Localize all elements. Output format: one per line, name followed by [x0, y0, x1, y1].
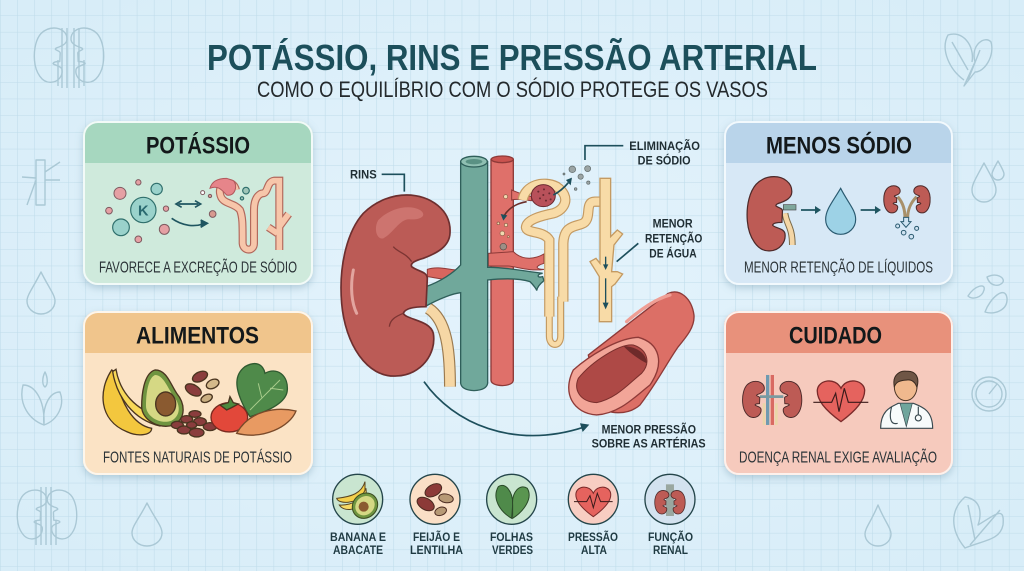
- icon: glomerulus: [531, 185, 555, 207]
- panel: cuidado: [724, 311, 953, 475]
- panel: alimentos: [83, 311, 313, 475]
- label: pressão alta: PRESSÃO: [568, 529, 618, 544]
- label: menor retenção de água: DE ÁGUA: [649, 246, 697, 261]
- label: função renal: [648, 529, 693, 557]
- icon: aorta: [488, 156, 544, 386]
- label: menor pressão sobre as artérias: SOBRE AS ARTÉRIAS: [592, 436, 706, 451]
- label: feijão e lentilha: FEIJÃO E: [413, 529, 460, 544]
- icon: vena cava: [426, 156, 544, 391]
- label: eliminação de sódio: [585, 138, 700, 167]
- caption: potássio: FAVORECE A EXCREÇÃO DE SÓDIO: [99, 260, 297, 276]
- icon: nephron tubule: [523, 184, 605, 344]
- label: função renal: RENAL: [653, 543, 688, 557]
- label: menor retenção de água: MENOR: [653, 217, 693, 231]
- caption: menos sódio: MENOR RETENÇÃO DE LÍQUIDOS: [744, 260, 933, 276]
- icon: leafy greens: [487, 474, 537, 524]
- panel: menos sódio: [724, 121, 953, 285]
- label: feijão e lentilha: LENTILHA: [410, 543, 463, 557]
- label: função renal: FUNÇÃO: [648, 529, 693, 544]
- title: POTÁSSIO, RINS E PRESSÃO ARTERIAL: [207, 36, 817, 78]
- label: banana e abacate: BANANA E: [330, 530, 386, 544]
- subtitle: COMO O EQUILÍBRIO COM O SÓDIO PROTEGE OS VASOS: [257, 77, 768, 102]
- label: folhas verdes: FOLHAS: [490, 530, 533, 544]
- label: rins: RINS: [350, 168, 377, 182]
- label: pressão alta: [568, 529, 618, 557]
- label: pressão alta: ALTA: [581, 543, 607, 557]
- icon: artery cross-section: [569, 292, 694, 415]
- arrows: water down duct: [603, 257, 609, 309]
- arrow: into aorta: [501, 202, 527, 221]
- central diagram: kidney, vessels, nephron and artery: [341, 138, 706, 451]
- icon: sodium particles: [563, 166, 591, 190]
- label: rins: [350, 168, 404, 192]
- icon: potassium ions and nephron: [106, 178, 289, 250]
- caption: cuidado: DOENÇA RENAL EXIGE AVALIAÇÃO: [739, 450, 937, 466]
- icon: banana and avocado: [333, 474, 383, 524]
- label: menor pressão sobre as artérias: [592, 421, 706, 451]
- label: folhas verdes: VERDES: [492, 543, 533, 557]
- label: folhas verdes: [490, 530, 533, 557]
- icon: ureter: [428, 308, 450, 387]
- label: banana e abacate: ABACATE: [333, 543, 383, 557]
- label: eliminação de sódio: DE SÓDIO: [638, 152, 691, 167]
- label: eliminação de sódio: ELIMINAÇÃO: [629, 138, 700, 153]
- label: menor retenção de água: [617, 217, 702, 262]
- heading: alimentos: ALIMENTOS: [136, 322, 259, 350]
- arrow: kidney to lower artery pressure: [424, 382, 589, 436]
- heading: cuidado: CUIDADO: [789, 322, 882, 350]
- heading: potássio: POTÁSSIO: [146, 132, 250, 160]
- icon: potassium foods: [103, 364, 296, 437]
- icon: high blood pressure heart: [568, 474, 618, 524]
- icon: collecting duct: [590, 178, 623, 322]
- panel: potássio: [83, 121, 313, 285]
- icon: renal artery left branch: [427, 268, 463, 280]
- label: menor retenção de água: RETENÇÃO: [645, 231, 702, 246]
- label: feijão e lentilha: [410, 529, 463, 557]
- icon: kidney function: [645, 474, 695, 524]
- arrow: sodium out of glomerulus: [553, 178, 572, 195]
- label: banana e abacate: [330, 530, 386, 557]
- icon: potassium ions and nephron: K: [138, 203, 149, 219]
- icon: kidney, water drop and excretion: [747, 177, 930, 251]
- caption: alimentos: FONTES NATURAIS DE POTÁSSIO: [103, 450, 292, 466]
- icon: kidney: [341, 195, 450, 376]
- icon row: food and health topics: [330, 474, 695, 557]
- icon: kidneys, heart and doctor: [743, 371, 933, 428]
- heading: menos sódio: MENOS SÓDIO: [766, 132, 912, 160]
- label: menor pressão sobre as artérias: MENOR PRESSÃO: [602, 421, 696, 436]
- icon: beans and lentils: [410, 474, 460, 524]
